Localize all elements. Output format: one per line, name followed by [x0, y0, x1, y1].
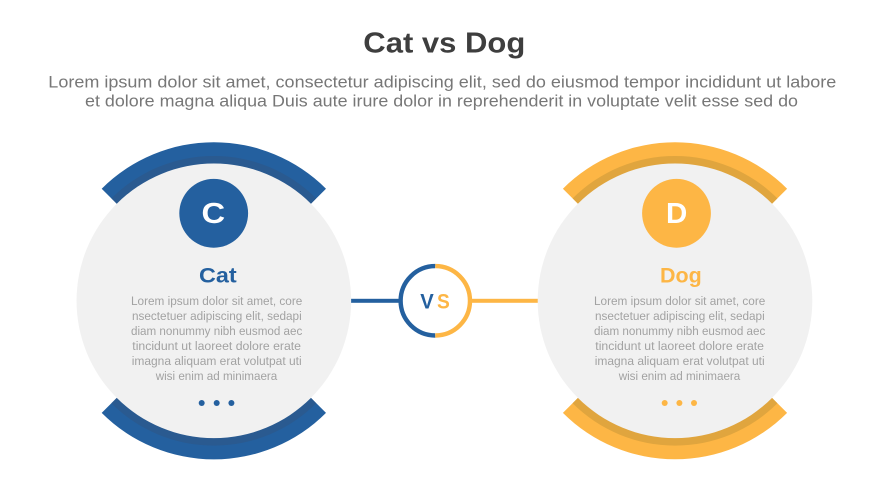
body text: dog	[594, 294, 766, 383]
connector line: cat to vs	[351, 299, 400, 303]
panel: cat	[77, 142, 351, 459]
dots: dog	[662, 400, 697, 406]
top arc shadow: dog	[573, 156, 777, 204]
bottom arc: dog	[563, 398, 787, 459]
body text: cat: tincidunt ut laoreet dolore erate	[132, 339, 301, 353]
dots: cat	[199, 400, 234, 406]
vs ring: blue half	[401, 266, 435, 336]
subtitle text block: et dolore magna aliqua Duis aute irure dolor in reprehenderit in voluptate velit esse sed do	[85, 93, 798, 111]
subtitle text block: Lorem ipsum dolor sit amet, consectetur adipiscing elit, sed do eiusmod tempor incididunt ut labore	[48, 74, 836, 92]
top arc: cat	[102, 142, 326, 204]
bottom arc: cat	[102, 398, 326, 459]
heading: Cat: Cat	[199, 265, 237, 288]
vs badge	[401, 266, 470, 336]
top arc shadow: cat	[111, 156, 316, 204]
bottom arc shadow: dog	[573, 398, 777, 446]
connector line: dog to vs	[471, 299, 538, 303]
heading: Dog: Dog	[660, 265, 702, 288]
vs label: V	[420, 290, 434, 314]
vs ring: yellow half	[435, 266, 470, 336]
title: Cat vs Dog	[363, 28, 525, 60]
body text: cat	[131, 294, 303, 383]
body text: dog: tincidunt ut laoreet dolore erate	[595, 339, 764, 353]
body text: dog: Lorem ipsum dolor sit amet, core	[594, 294, 766, 308]
body text: cat: wisi enim ad minimaera	[155, 369, 278, 383]
vs label: S	[437, 290, 450, 314]
top arc: dog	[563, 142, 787, 204]
bottom arc shadow: cat	[111, 398, 316, 446]
body text: dog: wisi enim ad minimaera	[618, 369, 741, 383]
vs label	[420, 290, 450, 314]
icon badge: C: C	[202, 198, 225, 230]
body text: dog: imagna aliquam erat volutpat uti	[595, 354, 765, 368]
icon badge: D	[642, 179, 711, 248]
body text: dog: nsectetuer adipiscing elit, sedapi	[595, 309, 765, 323]
icon badge: D: D	[666, 198, 687, 230]
body text: cat: imagna aliquam erat volutpat uti	[132, 354, 302, 368]
body text: dog: diam nonummy nibh eusmod aec	[594, 324, 765, 338]
body text: cat: nsectetuer adipiscing elit, sedapi	[132, 309, 302, 323]
panel: dog	[538, 142, 812, 459]
gray circle: dog	[538, 163, 812, 438]
icon badge: C	[179, 179, 248, 248]
gray circle: cat	[77, 163, 351, 438]
body text: cat: Lorem ipsum dolor sit amet, core	[131, 294, 303, 308]
body text: cat: diam nonummy nibh eusmod aec	[131, 324, 302, 338]
subtitle text block	[48, 74, 836, 111]
